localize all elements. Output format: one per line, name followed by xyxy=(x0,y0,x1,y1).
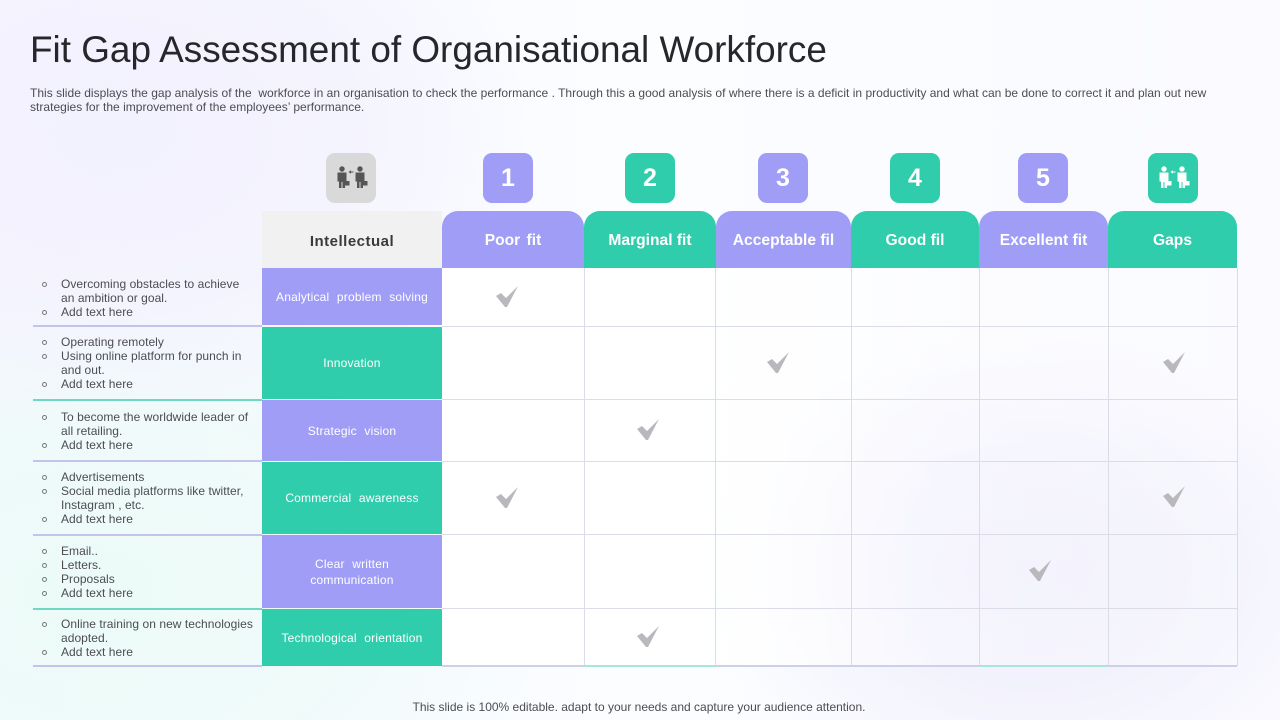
bullets: row 6: adopted. xyxy=(61,631,108,645)
row label: Clear written communication xyxy=(262,535,442,608)
badge 5 xyxy=(1018,153,1068,203)
row label: Analytical problem solving xyxy=(262,268,442,325)
header: Good fil xyxy=(851,211,979,268)
description text: This slide displays the gap analysis of the workforce in an organisation to check the performance . Through this a good analysis of where there is a deficit in productivity and what can be done to correct it and plan out new xyxy=(30,86,1206,100)
header: Excellent fit: Excellent fit xyxy=(1000,232,1087,249)
check: row 2 gaps xyxy=(1163,352,1185,373)
bullets: row 5: Email.. xyxy=(61,544,98,558)
bullets: row 6: Online training on new technologies xyxy=(61,617,253,631)
badge 1 xyxy=(483,153,533,203)
bullets: row 1: an ambition or goal. xyxy=(61,291,167,305)
bullets: row 2: Using online platform for punch in xyxy=(61,349,241,363)
header: Excellent fit xyxy=(979,211,1108,268)
description text: strategies for the improvement of the employees’ performance. xyxy=(30,100,364,114)
header: Acceptable fil: Acceptable fil xyxy=(733,232,834,249)
icon: green people gap badge xyxy=(1148,153,1198,203)
bullets: row 2 xyxy=(42,335,241,391)
header: Marginal fit: Marginal fit xyxy=(608,232,692,249)
check: row 1 poor fit xyxy=(496,286,518,307)
bullets: row 4 xyxy=(42,470,244,526)
row label: Clear written communication: Clear written xyxy=(315,556,389,570)
badge 5: 5 xyxy=(1036,164,1050,192)
grid body background xyxy=(442,268,1237,666)
bullets: row 3: Add text here xyxy=(61,438,133,452)
row label: Technological orientation xyxy=(262,609,442,666)
badge 3: 3 xyxy=(776,164,790,192)
row label: Innovation xyxy=(262,327,442,399)
header: Intellectual xyxy=(262,211,442,268)
badge 4 xyxy=(890,153,940,203)
bullets: row 6: Add text here xyxy=(61,645,133,659)
header: Poor fit: Poor fit xyxy=(485,232,541,249)
row label: Strategic vision xyxy=(262,400,442,461)
header: Intellectual: Intellectual xyxy=(310,232,394,250)
header: Marginal fit xyxy=(584,211,716,268)
bullets: row 6 xyxy=(42,617,253,659)
header: Gaps: Gaps xyxy=(1153,232,1192,249)
row label: Innovation: Innovation xyxy=(323,356,381,370)
bullets: row 4: Add text here xyxy=(61,512,133,526)
bullets: row 2: and out. xyxy=(61,363,105,377)
check: row 4 poor fit xyxy=(496,487,518,508)
header: Gaps xyxy=(1108,211,1237,268)
header: Poor fit xyxy=(442,211,584,268)
bullets: row 4: Advertisements xyxy=(61,470,144,484)
footer note: This slide is 100% editable. adapt to your needs and capture your audience attention. xyxy=(413,700,865,714)
bullets: row 4: Social media platforms like twitter, xyxy=(61,484,244,498)
badge 4: 4 xyxy=(908,164,922,192)
row label: Commercial awareness xyxy=(262,462,442,534)
badge 2 xyxy=(625,153,675,203)
check: row 2 acceptable fit xyxy=(767,352,789,373)
title: Fit Gap Assessment of Organisational Workforce xyxy=(30,29,827,70)
bullets: row 5 xyxy=(42,544,133,600)
bullets: row 5: Letters. xyxy=(61,558,101,572)
row label: Strategic vision: Strategic vision xyxy=(308,424,396,438)
badge 1: 1 xyxy=(501,164,515,192)
icon: grey people gap badge xyxy=(326,153,376,203)
row label: Commercial awareness: Commercial awareness xyxy=(285,491,419,505)
badge 3 xyxy=(758,153,808,203)
bullets: row 3 xyxy=(42,410,248,452)
bullets: row 1: Add text here xyxy=(61,305,133,319)
check: row 4 gaps xyxy=(1163,486,1185,507)
bullets: row 1 xyxy=(42,277,239,319)
header: Acceptable fil xyxy=(716,211,851,268)
check: row 3 marginal fit xyxy=(637,419,659,440)
description text xyxy=(30,86,1206,114)
bullets: row 2: Add text here xyxy=(61,377,133,391)
bullets: row 4: Instagram , etc. xyxy=(61,498,144,512)
bullets: row 5: Add text here xyxy=(61,586,133,600)
row label: Technological orientation: Technological orientation xyxy=(281,630,423,644)
bullets: row 2: Operating remotely xyxy=(61,335,164,349)
header: Good fil: Good fil xyxy=(886,232,944,249)
badge 2: 2 xyxy=(643,164,657,192)
check: row 6 marginal fit xyxy=(637,626,659,647)
bullets: row 1: Overcoming obstacles to achieve xyxy=(61,277,239,291)
bullets: row 3: To become the worldwide leader of xyxy=(61,410,248,424)
row label: Clear written communication: communication xyxy=(310,572,394,586)
bullets: row 5: Proposals xyxy=(61,572,115,586)
row label: Analytical problem solving: Analytical problem solving xyxy=(276,290,428,304)
check: row 5 excellent fit xyxy=(1029,560,1051,581)
bullets: row 3: all retailing. xyxy=(61,424,122,438)
